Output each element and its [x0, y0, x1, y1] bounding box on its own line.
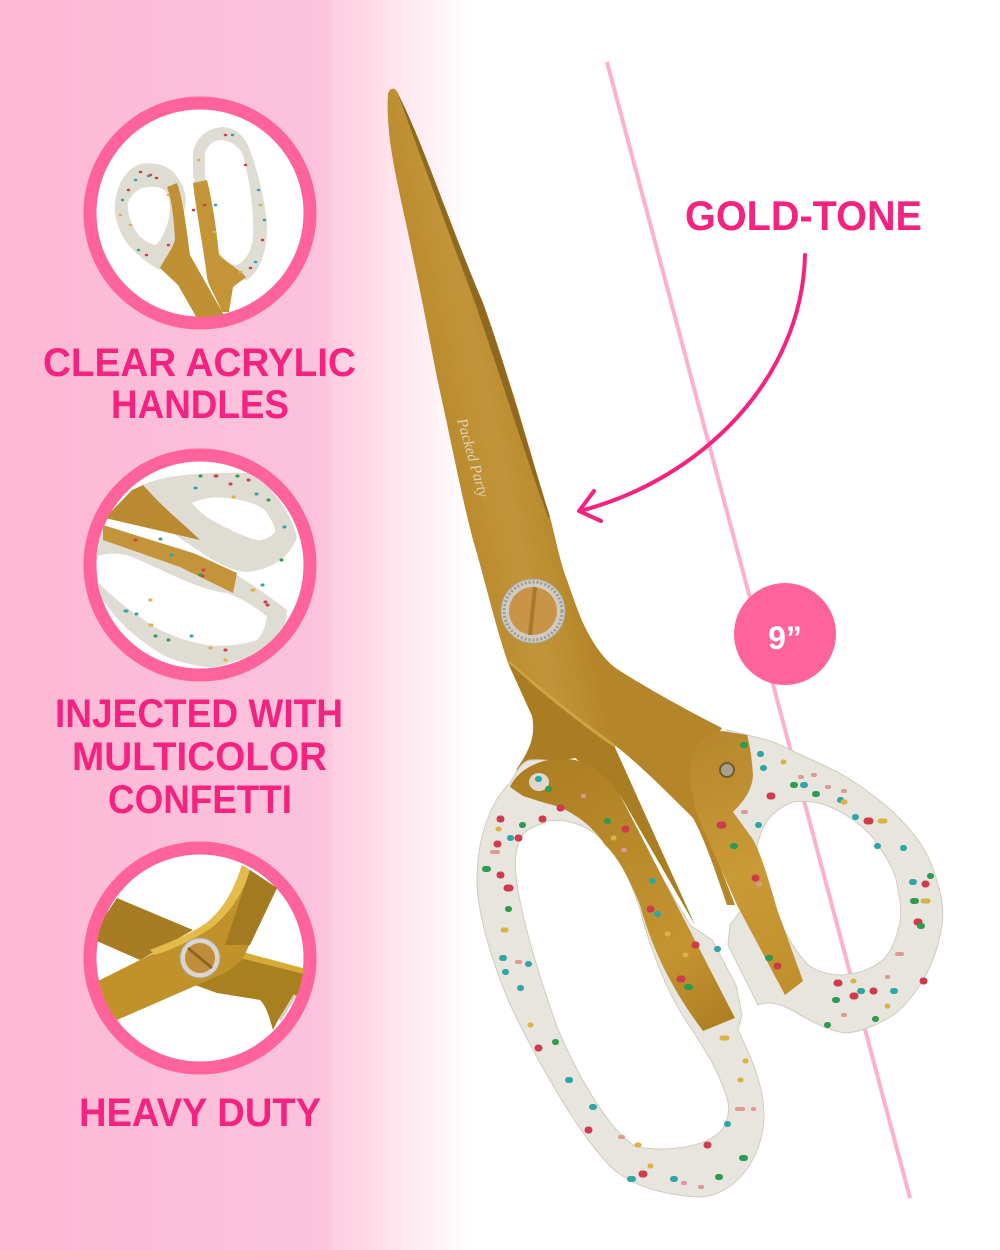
left handle gold tang [510, 759, 735, 1031]
blade fold highlight [507, 661, 617, 747]
badge: 9 inch length [734, 583, 836, 685]
measuring line [607, 62, 910, 1198]
blade edge: second blade behind [398, 94, 550, 517]
left tang rivet [529, 773, 549, 791]
engraved brand mark: Packed Party [453, 416, 491, 499]
heading: injected with multicolor confetti: INJECTED WITH [55, 692, 343, 736]
confetti: pink [492, 775, 902, 1187]
label: gold-tone: GOLD-TONE [685, 192, 922, 239]
feature circle: clear acrylic handles [90, 103, 310, 323]
heading: clear acrylic handles [43, 341, 356, 427]
pivot screw [501, 579, 565, 643]
confetti: teal [502, 754, 914, 1179]
heading: clear acrylic handles: CLEAR ACRYLIC [43, 341, 356, 385]
badge: 9 inch length: 9” [768, 620, 802, 656]
confetti: green [485, 745, 931, 1177]
right handle gold tang [690, 731, 803, 995]
tang rivet [720, 763, 734, 777]
feature circle: multicolor confetti [90, 455, 310, 675]
heading: injected with multicolor confetti: MULTICOLOR [72, 735, 327, 779]
right finger loop: clear acrylic handle [720, 730, 943, 1033]
heading: injected with multicolor confetti: CONFETTI [108, 778, 292, 822]
heading: clear acrylic handles: HANDLES [111, 383, 289, 427]
left finger loop: clear acrylic handle [477, 760, 764, 1197]
upper blade and shank [388, 89, 735, 905]
confetti: red [497, 796, 926, 1174]
confetti: gold [498, 762, 928, 1166]
arrow: gold-tone to blade [579, 255, 805, 521]
scissors illustration [388, 89, 943, 1197]
heading: injected with multicolor confetti [55, 692, 343, 822]
heading: heavy duty: HEAVY DUTY [79, 1091, 321, 1135]
lower blade shank [508, 663, 695, 925]
feature circle: heavy duty pivot close-up [90, 848, 310, 1068]
